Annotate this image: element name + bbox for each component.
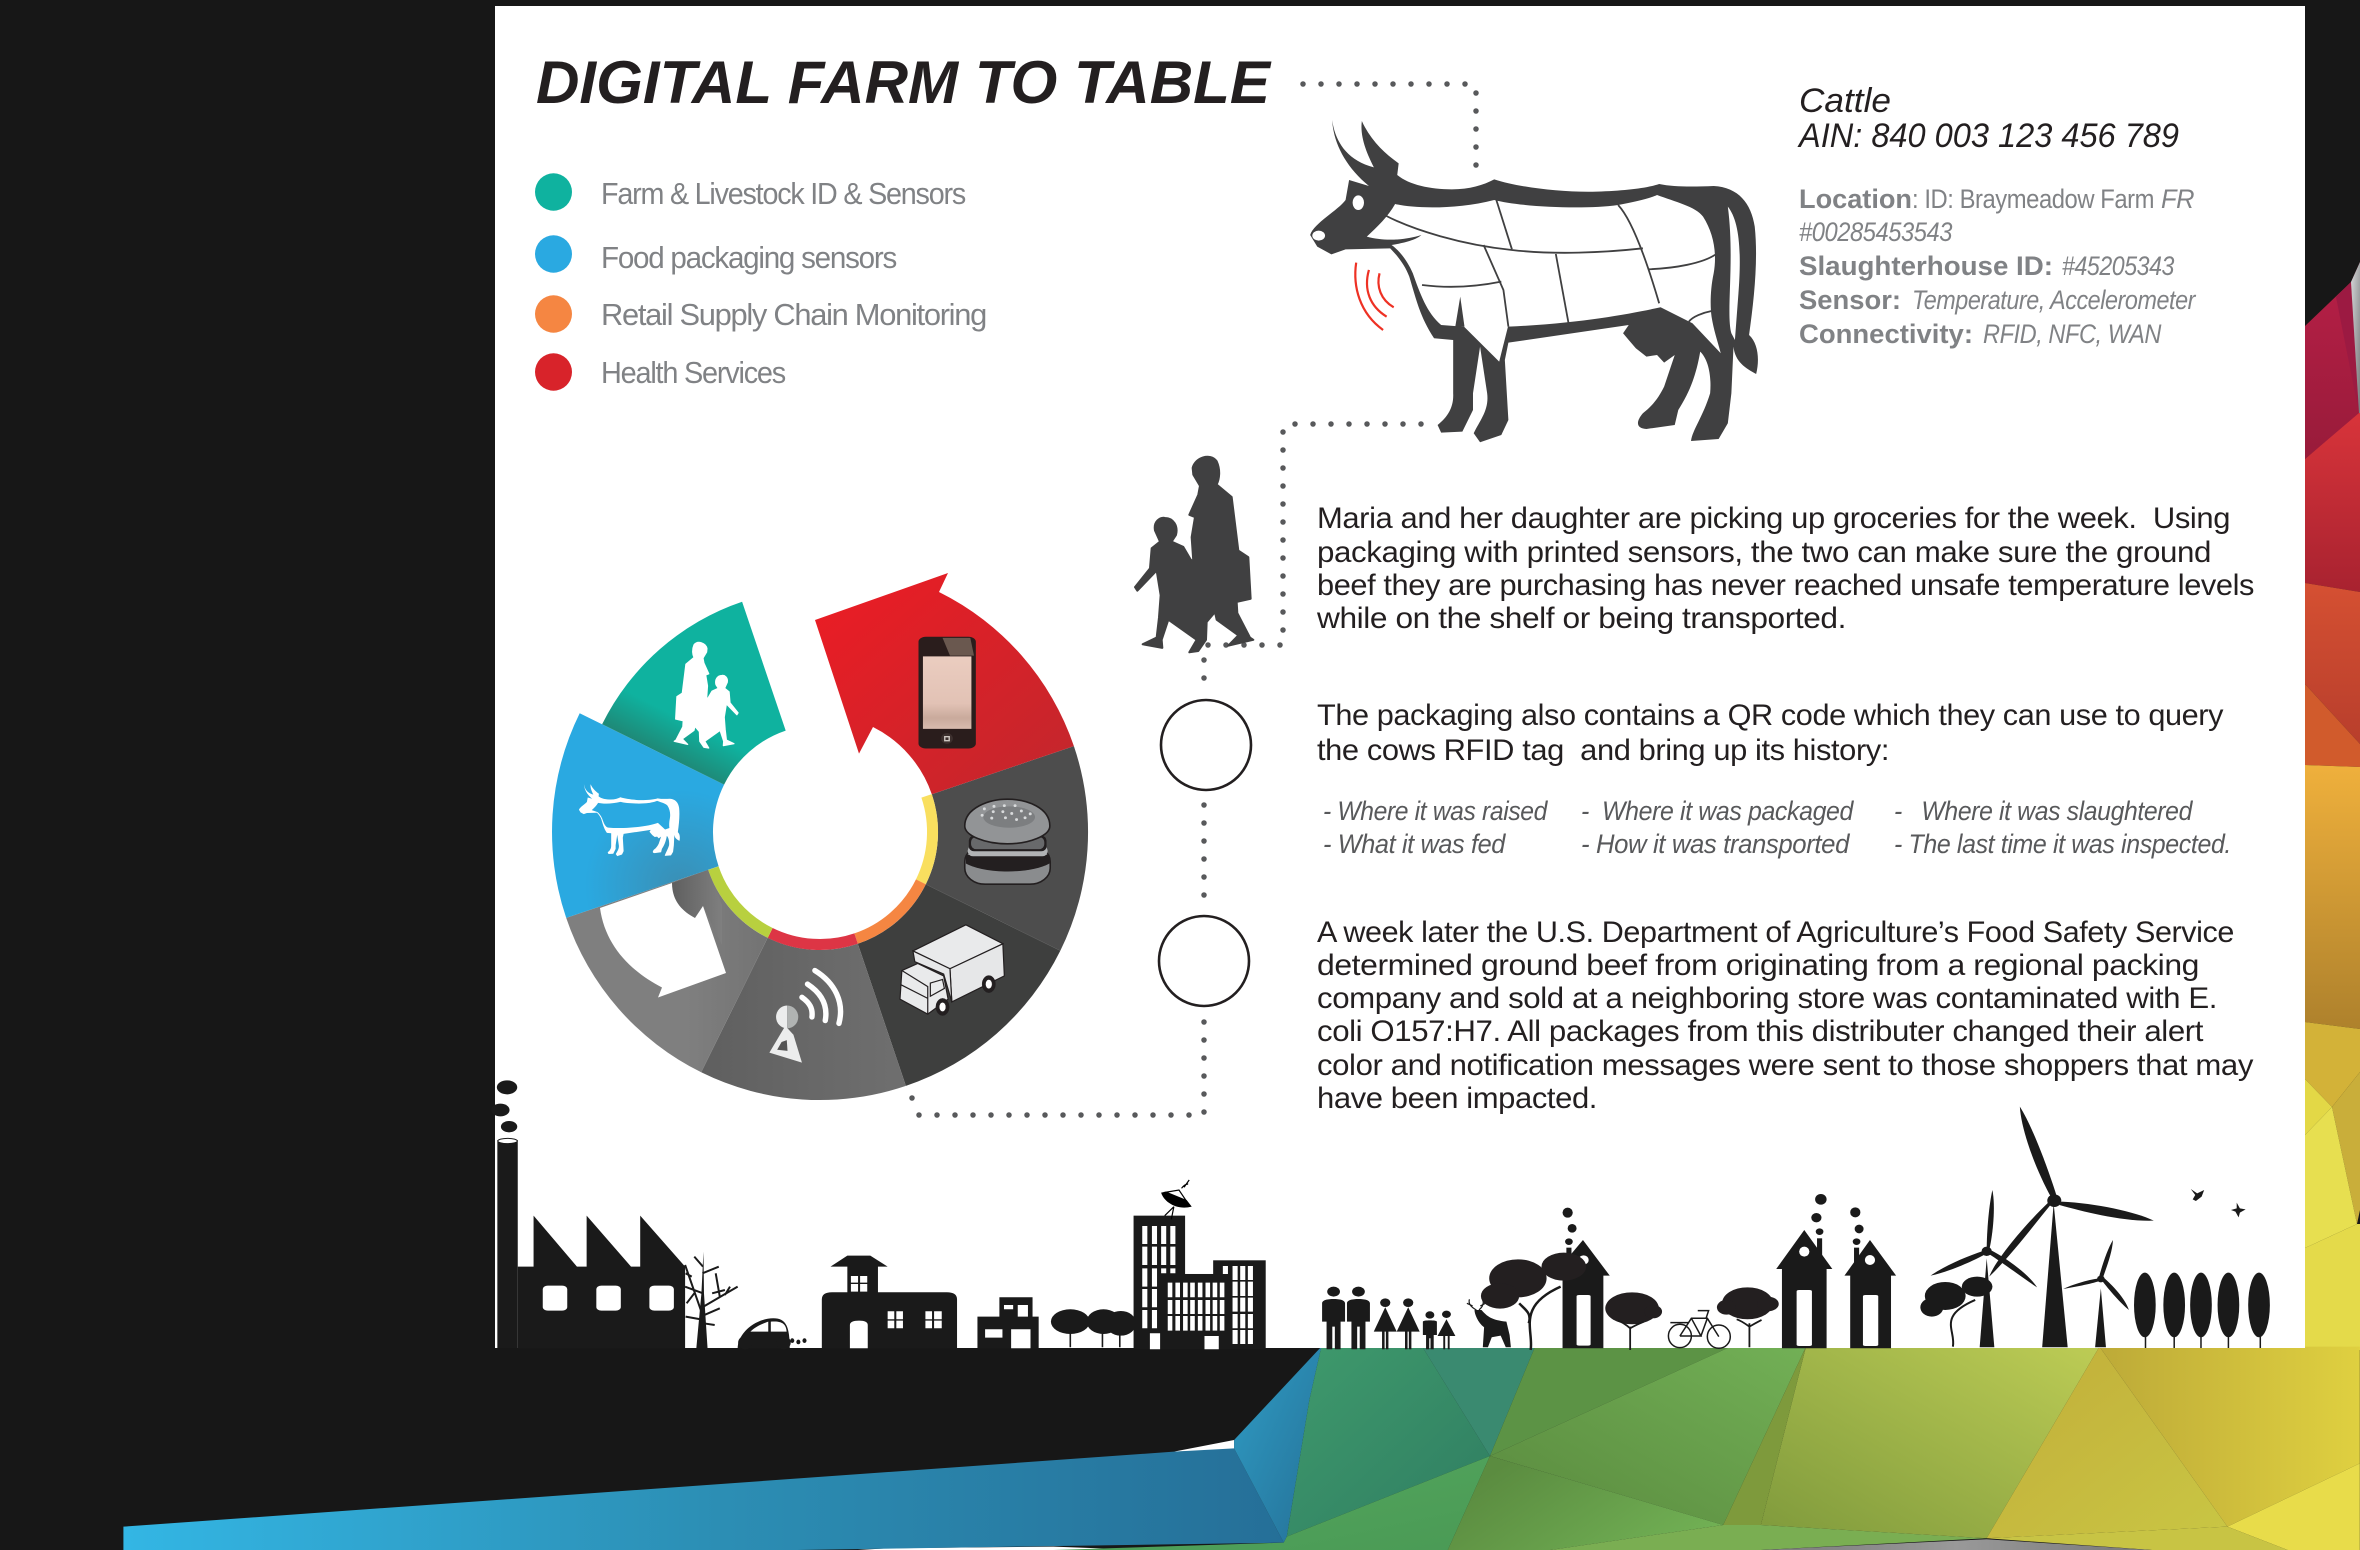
paragraph: food safety recall: coli O157:H7. All packages from this distributer changed their alert bbox=[1317, 1015, 2204, 1048]
paragraph: QR code: The packaging also contains a QR code which they can use to query bbox=[1317, 699, 2223, 732]
dotted connector: cow to shoppers bbox=[1204, 424, 1421, 696]
paragraph: Maria and her daughter: beef they are purchasing has never reached unsafe temperature levels bbox=[1317, 569, 2254, 602]
dotted connector: circle 1 to circle 2 bbox=[1201, 805, 1207, 913]
bicycle bbox=[1668, 1311, 1730, 1348]
history list: - Where it was slaughtered bbox=[1894, 796, 2193, 826]
icon: delivery truck bbox=[900, 925, 1004, 1016]
tree with house 1 bbox=[1481, 1208, 1610, 1350]
round trees bbox=[1051, 1309, 1136, 1347]
paragraph: food safety recall: color and notification messages were sent to those shoppers that may bbox=[1317, 1049, 2253, 1082]
birds bbox=[2191, 1189, 2246, 1217]
paragraph: Maria and her daughter: while on the shelf or being transported. bbox=[1316, 602, 1846, 635]
segment: truck bbox=[858, 884, 1060, 1086]
factory bbox=[491, 1080, 685, 1348]
cattle details: RFID, NFC, WAN bbox=[1983, 319, 2162, 349]
paragraph: food safety recall: company and sold at a neighboring store was contaminated with E. bbox=[1317, 982, 2217, 1015]
history list: - How it was transported bbox=[1581, 829, 1850, 859]
history list: - The last time it was inspected. bbox=[1894, 829, 2231, 859]
cattle title bbox=[1797, 82, 2179, 155]
bare tree bbox=[685, 1252, 738, 1348]
legend item: food packaging bbox=[535, 235, 897, 275]
tree by turbines bbox=[1920, 1277, 1992, 1347]
round tree 3 bbox=[1717, 1287, 1779, 1347]
paragraph: food safety recall: have been impacted. bbox=[1317, 1082, 1597, 1115]
office buildings bbox=[1134, 1216, 1266, 1349]
history list: - What it was fed bbox=[1323, 829, 1506, 859]
cattle details: #00285453543 bbox=[1799, 217, 1952, 247]
timeline circle 2 bbox=[1159, 916, 1249, 1006]
cattle details: Connectivity: bbox=[1799, 319, 1973, 349]
paragraph: food safety recall: determined ground beef from originating from a regional packing bbox=[1317, 949, 2199, 982]
arrow shadow bbox=[672, 870, 722, 945]
segment: red arrow bbox=[815, 573, 1074, 794]
cattle details: Temperature, Accelerometer bbox=[1912, 285, 2196, 315]
segment: packaged food bbox=[926, 746, 1088, 951]
icon: white cow bbox=[579, 784, 680, 856]
background: bottom polygon band bbox=[123, 1347, 2360, 1550]
paragraph: Maria and her daughter: packaging with printed sensors, the two can make sure the ground bbox=[1317, 536, 2211, 569]
title: DIGITAL FARM TO TABLE bbox=[536, 49, 1272, 116]
round tree 2 bbox=[1605, 1292, 1662, 1350]
cattle details: Slaughterhouse ID: bbox=[1799, 251, 2053, 281]
deer bbox=[1467, 1299, 1511, 1347]
segment: antenna bbox=[701, 938, 906, 1100]
history list bbox=[1323, 796, 2231, 859]
timeline circle 1 bbox=[1161, 700, 1251, 790]
background: right polygon band bbox=[2305, 262, 2360, 1350]
history list: - Where it was raised bbox=[1323, 796, 1548, 826]
segment: teal shoppers bbox=[602, 602, 786, 785]
dotted connector: title to cow bbox=[1303, 84, 1476, 183]
houses 2 and 3 bbox=[1776, 1194, 1896, 1348]
dotted connector: circle 2 to donut bbox=[912, 1022, 1204, 1115]
legend item: health services bbox=[535, 353, 786, 391]
icon: mother and daughter silhouette bbox=[1135, 457, 1253, 652]
satellite dish bbox=[1161, 1180, 1192, 1219]
legend item: health services: Health Services bbox=[601, 355, 786, 390]
paragraph: Maria and her daughter: Maria and her daughter are picking up groceries for the week. Using bbox=[1317, 502, 2230, 535]
cattle details: : ID: Braymeadow Farm bbox=[1912, 184, 2154, 214]
segment: grey return arrow bbox=[566, 870, 768, 1072]
skyline left: factory, car, house, buildings bbox=[491, 1080, 1266, 1349]
cattle details: Sensor: bbox=[1799, 285, 1901, 315]
icon: white shoppers bbox=[674, 642, 738, 748]
white panel bbox=[495, 6, 2305, 1348]
red sensor signal arcs bbox=[1355, 263, 1394, 330]
cattle title: Cattle bbox=[1799, 82, 1891, 120]
legend item: retail supply chain: Retail Supply Chain Monitoring bbox=[601, 297, 986, 332]
paragraph: QR code bbox=[1317, 699, 2223, 767]
car bbox=[738, 1318, 807, 1349]
cattle details: FR bbox=[2161, 184, 2194, 214]
cattle details: #45205343 bbox=[2062, 251, 2174, 281]
cattle details: Location bbox=[1799, 184, 1912, 214]
white arrow bbox=[600, 883, 726, 998]
donut diagram bbox=[552, 573, 1088, 1100]
icon: burger bbox=[965, 799, 1050, 884]
legend item: farm and livestock: Farm & Livestock ID & Sensors bbox=[601, 176, 966, 211]
cow with butcher cuts bbox=[1310, 120, 1758, 442]
history list: - Where it was packaged bbox=[1581, 796, 1854, 826]
family figures bbox=[1322, 1287, 1455, 1349]
icon: smartphone bbox=[918, 637, 976, 748]
paragraph: food safety recall bbox=[1317, 916, 2253, 1115]
small building bbox=[977, 1297, 1039, 1348]
paragraph: food safety recall: A week later the U.S. Department of Agriculture’s Food Safety Service bbox=[1317, 916, 2234, 949]
skyline right: people, houses, wind turbines, trees bbox=[1322, 1107, 2270, 1350]
cypress trees bbox=[2134, 1273, 2270, 1348]
house bbox=[822, 1256, 957, 1348]
segment: blue farm bbox=[552, 713, 724, 918]
legend bbox=[535, 173, 986, 391]
cattle details bbox=[1799, 184, 2196, 349]
paragraph: Maria and her daughter bbox=[1316, 502, 2254, 635]
icon: wireless antenna bbox=[769, 971, 841, 1063]
paragraph: QR code: the cows RFID tag and bring up its history: bbox=[1317, 734, 1889, 767]
wind turbines bbox=[1931, 1107, 2154, 1347]
inner ring bbox=[713, 796, 933, 945]
legend item: food packaging: Food packaging sensors bbox=[601, 240, 897, 275]
cattle title: AIN: 840 003 123 456 789 bbox=[1797, 117, 2179, 155]
